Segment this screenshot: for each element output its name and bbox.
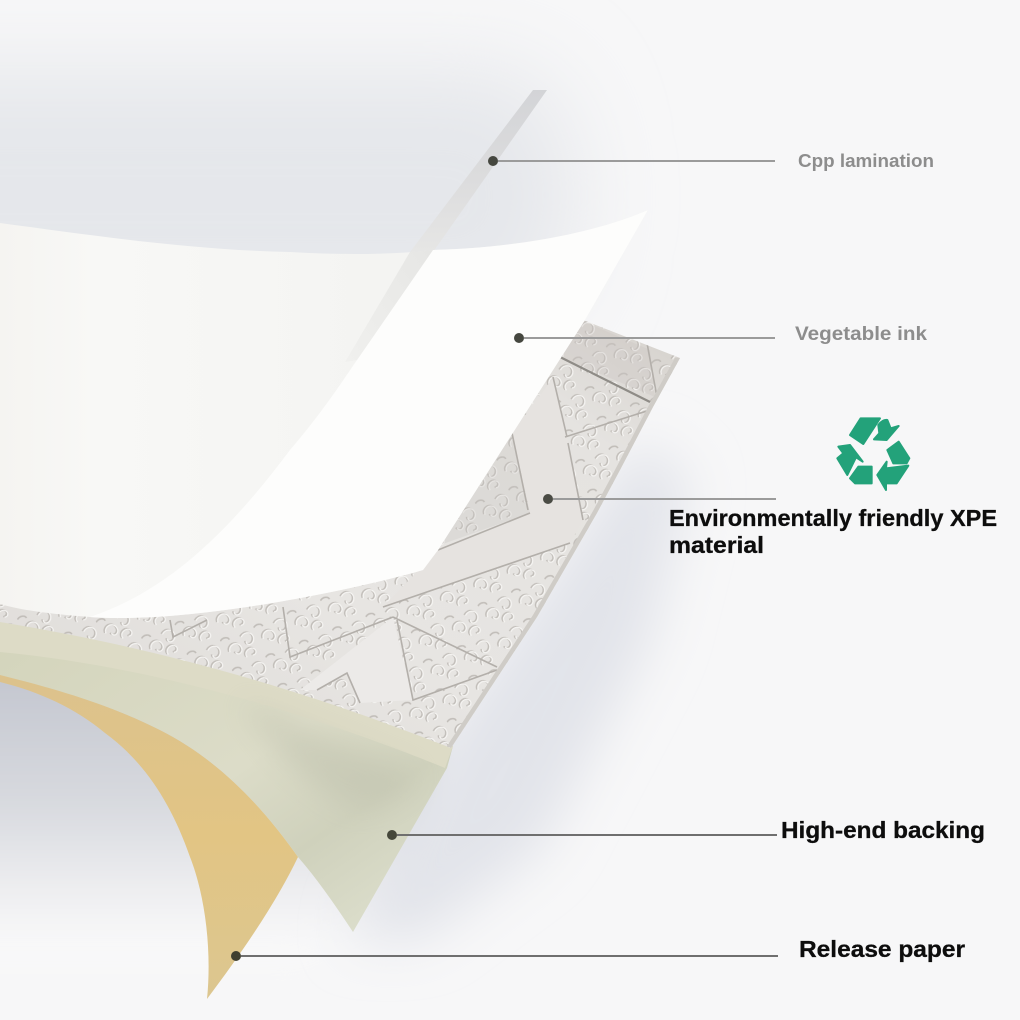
foam smooth triangles: [300, 322, 655, 703]
layer: release paper: [0, 672, 298, 999]
callout: High-end backing: [387, 817, 985, 843]
layer: high-end backing: [0, 622, 453, 932]
strip continuation: [345, 250, 433, 362]
callout: Environmentally friendly XPE material: [543, 494, 997, 558]
backing cream edge band: [0, 622, 453, 768]
callout: Cpp lamination: [488, 150, 934, 171]
callout: Release paper: Release paper: [799, 936, 965, 962]
icon: recycling symbol: [837, 418, 909, 490]
sheet bright right face: [90, 210, 648, 618]
callout: Environmentally friendly XPE material: Environmentally friendly XPE: [669, 505, 997, 531]
callout: Vegetable ink: Vegetable ink: [795, 324, 927, 345]
callout: Environmentally friendly XPE material: material: [669, 532, 764, 558]
foam swirl texture: [0, 320, 680, 748]
backing shaded patch: [240, 700, 420, 808]
callout: Vegetable ink: [514, 324, 927, 345]
callout: Release paper: [231, 936, 965, 962]
foam side edge: [447, 358, 680, 748]
layer: XPE foam: [0, 320, 680, 748]
layer: Cpp lamination strip: [410, 90, 547, 252]
foam embossed ridges: [170, 343, 657, 703]
callout: High-end backing: High-end backing: [781, 817, 985, 843]
layer: vegetable ink white sheet: [0, 210, 648, 618]
callout: Cpp lamination: Cpp lamination: [798, 150, 934, 171]
